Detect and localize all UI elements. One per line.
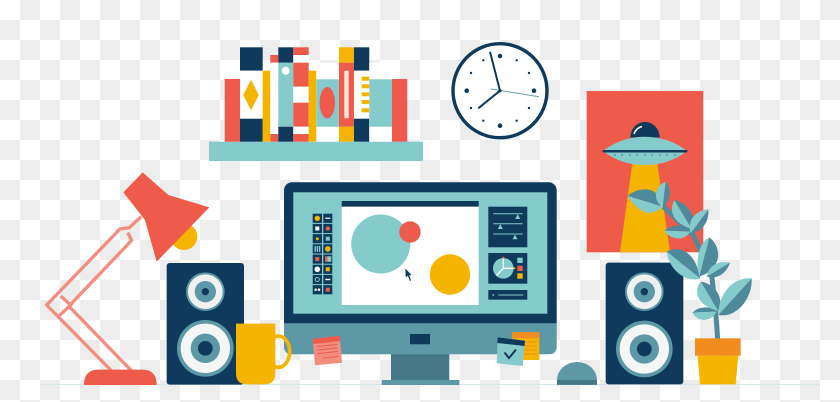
shelf	[209, 142, 423, 161]
books	[225, 47, 407, 142]
lamp shade	[123, 172, 209, 262]
monitor chin	[284, 323, 557, 354]
canvas	[342, 207, 479, 305]
desk lamp	[47, 172, 209, 385]
tool palette	[313, 214, 332, 294]
bulb	[171, 223, 197, 250]
bookshelf with books	[209, 47, 423, 161]
computer mouse	[557, 362, 597, 385]
pie chart panel	[488, 253, 527, 284]
right speaker	[606, 263, 683, 384]
screen	[293, 192, 547, 314]
cursor	[405, 268, 412, 281]
left speaker	[167, 263, 244, 385]
monitor stand	[382, 354, 459, 385]
flying saucer	[602, 122, 688, 165]
monitor	[284, 182, 557, 385]
canvas title bar	[342, 201, 479, 207]
UFO poster	[587, 91, 703, 252]
lamp arm	[47, 217, 141, 371]
stem	[663, 207, 718, 339]
status panel	[488, 290, 527, 300]
pot	[695, 338, 741, 384]
wall clock	[453, 44, 547, 138]
screen bezel	[284, 182, 557, 323]
leaves	[628, 182, 752, 320]
potted plant	[628, 182, 752, 384]
orange sticky note	[512, 332, 539, 360]
slider panel	[488, 207, 527, 247]
red sticky note	[313, 336, 342, 365]
monitor button	[410, 334, 430, 344]
light beam	[620, 163, 670, 252]
teal sticky note with check	[497, 337, 525, 366]
coffee mug	[236, 324, 290, 384]
lamp base	[84, 370, 157, 385]
